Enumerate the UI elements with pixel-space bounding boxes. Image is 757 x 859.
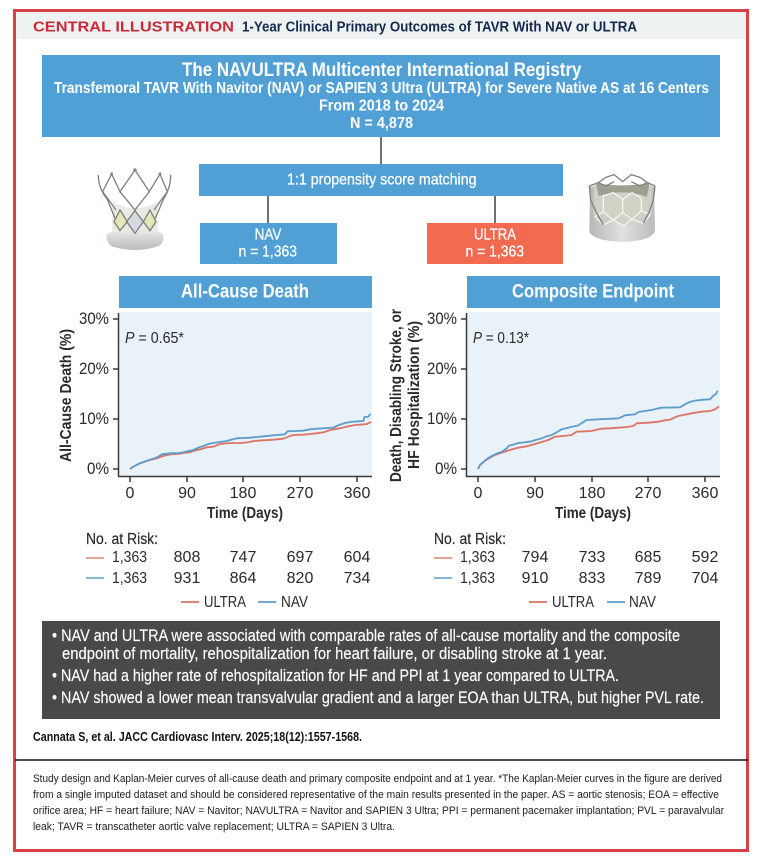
legend: composite endpoint xyxy=(529,594,656,611)
risk table: composite endpoint xyxy=(434,531,718,587)
risk table: all-cause death: 734 xyxy=(344,570,370,587)
legend: all-cause death: ULTRA xyxy=(204,594,246,611)
chart: composite endpoint Kaplan-Meier: 360 xyxy=(692,485,718,502)
title bar: 1-Year Clinical Primary Outcomes of TAVR With NAV or ULTRA xyxy=(242,20,637,36)
risk table: all-cause death: 808 xyxy=(174,549,200,566)
legend: composite endpoint: NAV xyxy=(629,594,656,611)
figure caption: leak; TAVR = transcatheter aortic valve replacement; ULTRA = SAPIEN 3 Ultra. xyxy=(33,821,395,833)
chart: all-cause death Kaplan-Meier: P = 0.65* xyxy=(125,330,184,347)
risk table: composite endpoint: 1,363 xyxy=(460,549,495,566)
panel heading: composite endpoint: Composite Endpoint xyxy=(512,282,675,302)
risk table: composite endpoint: 733 xyxy=(579,549,605,566)
chart: all-cause death Kaplan-Meier: Time (Days) xyxy=(207,505,283,522)
title bar: CENTRAL ILLUSTRATION xyxy=(33,20,234,36)
propensity matching box: 1:1 propensity score matching xyxy=(287,172,476,188)
ULTRA group box: ULTRA xyxy=(474,226,516,244)
chart: all-cause death Kaplan-Meier: 20% xyxy=(79,360,109,378)
risk table: composite endpoint: 1,363 xyxy=(460,570,495,587)
chart: composite endpoint Kaplan-Meier: 270 xyxy=(635,485,661,502)
chart: all-cause death Kaplan-Meier: 360 xyxy=(344,485,370,502)
chart: composite endpoint Kaplan-Meier: 20% xyxy=(427,360,457,378)
panel heading: all-cause death xyxy=(119,276,372,308)
legend: composite endpoint: ULTRA xyxy=(552,594,594,611)
chart: composite endpoint Kaplan-Meier: 0% xyxy=(435,460,457,478)
panel: composite endpoint xyxy=(388,276,720,611)
NAV group box: NAV xyxy=(254,226,282,244)
chart: composite endpoint Kaplan-Meier: 30% xyxy=(427,310,457,328)
panel heading: composite endpoint xyxy=(467,276,720,308)
citation: Cannata S, et al. JACC Cardiovasc Interv. 2025;18(12):1557-1568. xyxy=(33,730,362,744)
chart: composite endpoint Kaplan-Meier xyxy=(388,309,720,522)
title bar xyxy=(33,20,637,36)
chart: all-cause death Kaplan-Meier: 180 xyxy=(230,485,256,502)
NAV group box: n = 1,363 xyxy=(238,244,297,260)
chart: composite endpoint Kaplan-Meier: 180 xyxy=(579,485,605,502)
icon: SAPIEN 3 Ultra valve xyxy=(589,175,655,242)
legend: all-cause death: NAV xyxy=(281,594,308,611)
registry box xyxy=(42,55,720,137)
chart: all-cause death Kaplan-Meier: 90 xyxy=(178,485,196,502)
chart: all-cause death Kaplan-Meier: 10% xyxy=(79,410,109,428)
registry box: N = 4,878 xyxy=(350,115,413,132)
registry box: From 2018 to 2024 xyxy=(319,98,444,114)
risk table: composite endpoint: 704 xyxy=(692,570,718,587)
legend: all-cause death xyxy=(181,594,308,611)
key findings box: • NAV had a higher rate of rehospitalization for HF and PPI at 1 year compared to ULTRA. xyxy=(52,666,619,685)
risk table: composite endpoint: 789 xyxy=(635,570,661,587)
chart: composite endpoint Kaplan-Meier: HF Hospitalization (%) xyxy=(406,321,423,469)
key findings box: endpoint of mortality, rehospitalization for heart failure, or disabling stroke at 1 year. xyxy=(62,644,607,663)
chart: composite endpoint Kaplan-Meier: Time (Days) xyxy=(555,505,631,522)
propensity matching box xyxy=(199,164,563,196)
connector lines xyxy=(268,137,495,223)
panel heading: all-cause death: All-Cause Death xyxy=(181,282,309,302)
chart: all-cause death Kaplan-Meier xyxy=(58,310,372,522)
risk table: all-cause death: 697 xyxy=(287,549,313,566)
chart: composite endpoint Kaplan-Meier: 10% xyxy=(427,410,457,428)
registry box: The NAVULTRA Multicenter International Registry xyxy=(182,59,582,81)
risk table: all-cause death: 604 xyxy=(344,549,370,566)
risk table: all-cause death: 747 xyxy=(230,549,256,566)
chart: all-cause death Kaplan-Meier: 30% xyxy=(79,310,109,328)
ULTRA group box xyxy=(427,223,563,264)
risk table: all-cause death: 1,363 xyxy=(112,549,147,566)
risk table: composite endpoint: 685 xyxy=(635,549,661,566)
risk table: all-cause death: No. at Risk: xyxy=(86,531,158,548)
risk table: composite endpoint: 910 xyxy=(522,570,548,587)
ULTRA group box: n = 1,363 xyxy=(466,244,524,260)
risk table: composite endpoint: 592 xyxy=(692,549,718,566)
chart: composite endpoint Kaplan-Meier: 0 xyxy=(474,485,483,502)
risk table: all-cause death: 931 xyxy=(174,570,200,587)
risk table: all-cause death: 864 xyxy=(230,570,256,587)
figure caption xyxy=(33,773,724,833)
risk table: composite endpoint: 833 xyxy=(579,570,605,587)
chart: composite endpoint Kaplan-Meier: Death, Disabling Stroke, or xyxy=(388,309,405,482)
risk table: composite endpoint: 794 xyxy=(522,549,548,566)
risk table: all-cause death xyxy=(86,531,370,587)
chart: all-cause death Kaplan-Meier: 0% xyxy=(87,460,109,478)
chart: composite endpoint Kaplan-Meier: 90 xyxy=(526,485,544,502)
risk table: all-cause death: 1,363 xyxy=(112,570,147,587)
chart: composite endpoint Kaplan-Meier: P = 0.13* xyxy=(473,330,529,347)
chart: all-cause death Kaplan-Meier: All-Cause Death (%) xyxy=(58,329,75,462)
key findings box xyxy=(42,621,720,719)
risk table: composite endpoint: No. at Risk: xyxy=(434,531,506,548)
risk table: all-cause death: 820 xyxy=(287,570,313,587)
NAV group box xyxy=(200,223,337,264)
icon: Navitor valve xyxy=(98,168,171,250)
chart: all-cause death Kaplan-Meier: 0 xyxy=(126,485,135,502)
panel: all-cause death xyxy=(58,276,372,611)
figure caption: from a single imputed dataset and should be considered representative of the main results presented in the paper. AS = aortic stenosis; EOA = effective xyxy=(33,789,719,801)
figure caption: orifice area; HF = heart failure; NAV = Navitor; NAVULTRA = Navitor and SAPIEN 3 Ultra; PPI = permanent pacemaker implantation; PVL = paravalvular xyxy=(33,805,724,817)
chart: all-cause death Kaplan-Meier: 270 xyxy=(287,485,313,502)
